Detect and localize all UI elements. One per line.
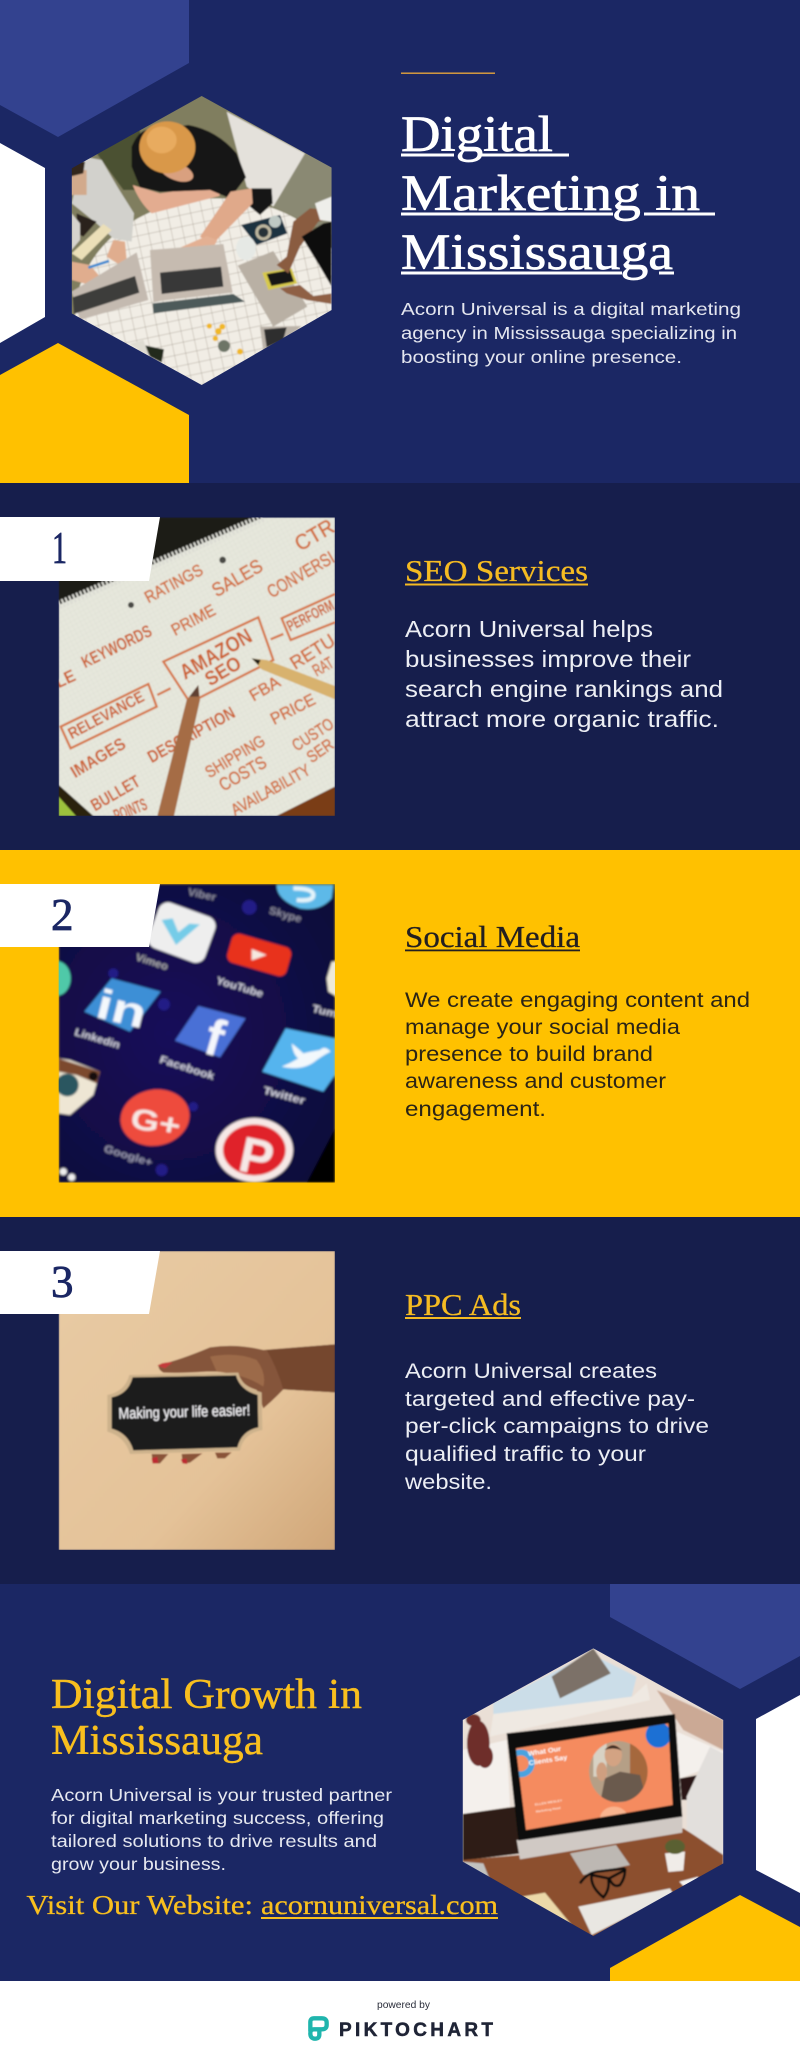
- photo: phone with social media apps: Skype: [268, 905, 303, 925]
- photo: SEO notepad with pencils: RETU: [286, 630, 339, 673]
- body: Social Media: [405, 989, 750, 1121]
- heading: Social Media: Social Media: [405, 920, 580, 954]
- heading: Digital Growth in Mississauga: Digital Growth in: [51, 1672, 362, 1718]
- body: PPC Ads: qualified traffic to your: [405, 1443, 646, 1466]
- heading: Digital Growth in Mississauga: [51, 1672, 362, 1764]
- title: Digital Marketing in Mississauga: [401, 107, 715, 281]
- website call to action: [26, 1889, 498, 1920]
- body: Social Media: awareness and customer: [405, 1070, 666, 1093]
- intro paragraph: Acorn Universal is a digital marketing: [401, 299, 741, 319]
- closing paragraph: tailored solutions to drive results and: [51, 1831, 377, 1851]
- photo: SEO notepad with pencils: PRICE: [267, 690, 319, 729]
- body: PPC Ads: targeted and effective pay-: [405, 1388, 695, 1411]
- photo: hand holding sign: Making your life easier!: [118, 1402, 250, 1423]
- photo: hand holding sign: [59, 1251, 335, 1550]
- photo: desktop monitor on wooden desk: What Our: [528, 1746, 562, 1758]
- hexagon: yellow bottom left: [0, 343, 189, 483]
- number tag 3: [0, 1251, 160, 1314]
- photo: phone with social media apps: P: [234, 1126, 279, 1188]
- body: Social Media: manage your social media: [405, 1016, 680, 1039]
- number tag 1: 1: [52, 523, 67, 573]
- Piktochart wordmark: PIKTOCHART: [339, 2020, 493, 2041]
- body: Social Media: presence to build brand: [405, 1043, 653, 1066]
- closing paragraph: grow your business.: [51, 1854, 226, 1874]
- photo: desktop monitor on wooden desk: Clients Say: [528, 1754, 568, 1767]
- photo: SEO notepad with pencils: POINTS: [111, 794, 150, 825]
- website call to action: Visit Our Website:: [26, 1889, 253, 1920]
- number tag 2: 2: [51, 890, 74, 940]
- panel: hero: [0, 0, 800, 483]
- photo: phone with social media apps: f: [199, 1007, 232, 1068]
- photo: phone with social media apps: Linkedin: [73, 1026, 121, 1052]
- hexagon: white right: [756, 1695, 800, 1893]
- number tag 2: [0, 884, 160, 947]
- photo: SEO notepad with pencils: AVAILABILITY: [228, 760, 314, 819]
- photo: phone with social media apps: G+: [128, 1102, 183, 1143]
- photo: SEO notepad with pencils: RAT: [309, 653, 337, 680]
- photo: phone with social media apps: YouTube: [215, 975, 265, 1000]
- photo: team working at laptops: [72, 96, 332, 385]
- hexagon: white left: [0, 143, 45, 343]
- photo: desktop monitor on wooden desk: ELLEN WESLEY: [535, 1798, 562, 1807]
- panel: footer: [0, 1981, 800, 2061]
- photo: SEO notepad with pencils: CTR: [290, 514, 339, 556]
- title: Digital Marketing in Mississauga: Mississauga: [401, 225, 673, 281]
- number tag 3: 3: [51, 1257, 74, 1307]
- powered by text: powered by: [377, 1999, 431, 2011]
- photo: SEO notepad with pencils: FBA: [246, 672, 284, 705]
- title: Digital Marketing in Mississauga: Digital: [401, 107, 553, 163]
- closing paragraph: for digital marketing success, offering: [51, 1808, 384, 1828]
- photo: phone with social media apps: Google+: [102, 1143, 154, 1169]
- body: PPC Ads: website.: [404, 1471, 492, 1494]
- photo: SEO notepad with pencils: SHIPPING: [202, 731, 269, 782]
- photo: SEO notepad with pencils: IMAGES: [67, 733, 129, 782]
- panel: PPC ads: [0, 1217, 800, 1584]
- hexagon: blue top left: [0, 0, 189, 137]
- hexagon: blue top right: [610, 1584, 800, 1689]
- photo: SEO notepad with pencils: PRIME: [168, 601, 219, 640]
- body: PPC Ads: per-click campaigns to drive: [405, 1415, 709, 1438]
- body: PPC Ads: [404, 1360, 709, 1494]
- body: Social Media: We create engaging content and: [405, 989, 750, 1012]
- photo: SEO notepad with pencils: BULLET: [87, 771, 144, 815]
- intro paragraph: boosting your online presence.: [401, 347, 682, 367]
- photo: SEO notepad with pencils: KEYWORDS: [78, 621, 155, 672]
- hexagon: yellow bottom right: [610, 1895, 800, 1981]
- heading: Digital Growth in Mississauga: Mississauga: [51, 1718, 263, 1764]
- number tag 1: [0, 517, 160, 581]
- photo: SEO notepad with pencils: CUSTO: [288, 714, 337, 755]
- heading: PPC Ads: PPC Ads: [405, 1288, 521, 1322]
- photo: phone with social media apps: [43, 884, 338, 1188]
- closing paragraph: Acorn Universal is your trusted partner: [51, 1785, 392, 1805]
- intro paragraph: [401, 299, 741, 367]
- photo: SEO notepad with pencils: RELEVANCE: [66, 688, 148, 743]
- accent line: [401, 72, 495, 74]
- photo: phone with social media apps: Viber: [187, 886, 217, 904]
- photo: SEO notepad with pencils: RATINGS: [141, 560, 206, 607]
- photo: SEO notepad with pencils: PERFORM: [284, 597, 337, 635]
- panel: SEO services: [0, 483, 800, 850]
- panel: social media: [0, 850, 800, 1217]
- photo: desktop monitor on wooden desk: [462, 1648, 724, 1936]
- body: SEO Services: search engine rankings and: [405, 676, 723, 702]
- photo: SEO notepad with pencils: CONVERSI: [264, 547, 338, 602]
- photo: SEO notepad with pencils: SALES: [209, 556, 267, 602]
- photo: phone with social media apps: Twitter: [262, 1085, 306, 1107]
- photo: phone with social media apps: in: [92, 980, 152, 1037]
- intro paragraph: agency in Mississauga specializing in: [401, 323, 737, 343]
- body: SEO Services: attract more organic traffic.: [405, 706, 719, 732]
- photo: desktop monitor on wooden desk: Marketing Head: [536, 1806, 561, 1814]
- photo: phone with social media apps: Vimeo: [134, 951, 170, 973]
- photo: SEO notepad with pencils: SER: [303, 735, 337, 767]
- photo: SEO notepad with pencils: LE: [52, 665, 78, 692]
- photo: phone with social media apps: Facebook: [158, 1054, 216, 1083]
- heading: SEO Services: SEO Services: [405, 554, 588, 588]
- body: SEO Services: [405, 616, 723, 732]
- title: Digital Marketing in Mississauga: Marketing in: [401, 166, 700, 222]
- photo: SEO notepad with pencils: COSTS: [215, 752, 270, 795]
- body: SEO Services: Acorn Universal helps: [405, 616, 653, 642]
- body: SEO Services: businesses improve their: [405, 646, 691, 672]
- body: PPC Ads: Acorn Universal creates: [405, 1360, 657, 1383]
- website call to action: acornuniversal.com: [261, 1889, 498, 1920]
- photo: phone with social media apps: Tum: [311, 1003, 338, 1021]
- photo: SEO notepad with pencils: DESCRIPTION: [144, 702, 238, 767]
- body: Social Media: engagement.: [405, 1098, 546, 1121]
- closing paragraph: [51, 1785, 392, 1874]
- photo: SEO notepad with pencils: AMAZON: [175, 624, 256, 684]
- panel: closing section: [0, 1584, 800, 1981]
- photo: SEO notepad with pencils: [52, 514, 339, 825]
- photo: SEO notepad with pencils: SEO: [201, 652, 245, 691]
- icon: Piktochart logo: [310, 2018, 327, 2039]
